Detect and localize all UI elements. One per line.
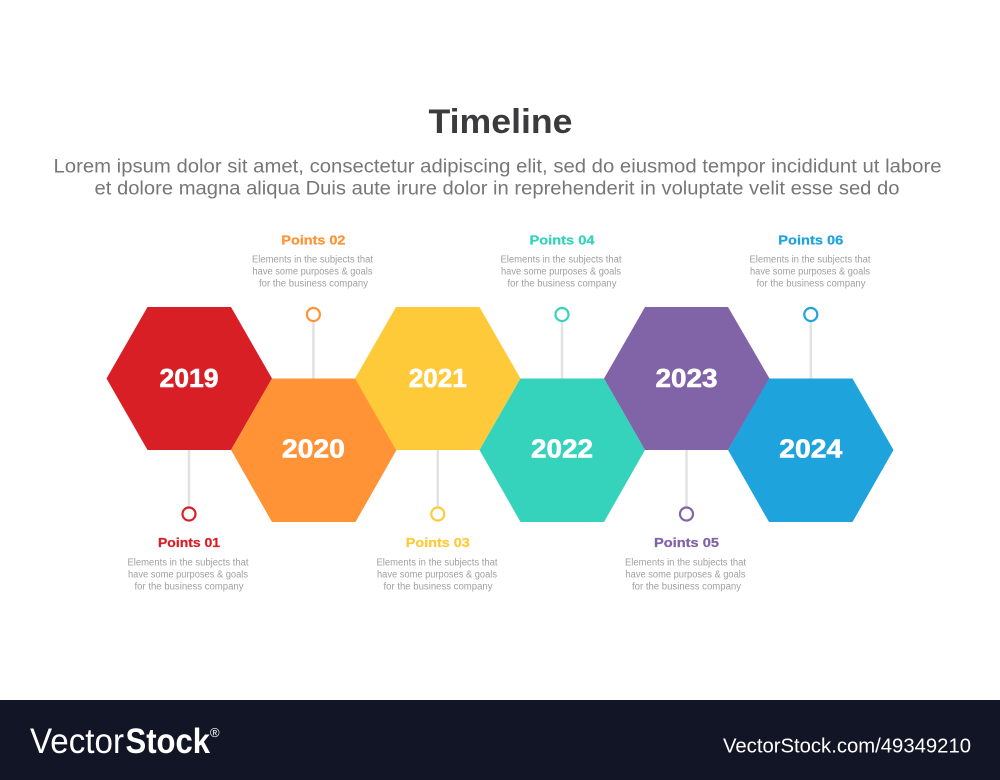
marker 01 — [182, 508, 196, 520]
description 03: for the business company — [384, 582, 492, 592]
description 05: for the business company — [632, 582, 741, 592]
registered mark: ® — [210, 725, 220, 740]
description 01: for the business company — [134, 582, 244, 592]
description 06 — [750, 254, 871, 290]
step 5: 2023 — [604, 307, 770, 592]
description 01: Elements in the subjects that — [128, 558, 249, 568]
step 3: 2021 — [355, 307, 520, 592]
marker 04 — [556, 308, 568, 321]
marker 02 — [307, 308, 320, 321]
marker 05 — [680, 508, 693, 520]
year 2021: 2021 — [409, 363, 467, 393]
marker 03 — [431, 508, 444, 520]
hexagon 2022 — [480, 378, 645, 522]
footer logo — [30, 722, 210, 761]
description 01: have some purposes & goals — [128, 570, 248, 580]
year 2020: 2020 — [282, 434, 345, 464]
description 06: for the business company — [756, 278, 866, 290]
hexagon 2020 — [231, 378, 396, 522]
label Points 06: Points 06 — [778, 232, 843, 248]
description 04: for the business company — [508, 278, 616, 290]
footer logo: Stock — [126, 722, 210, 761]
label Points 04: Points 04 — [530, 232, 595, 248]
year 2019: 2019 — [160, 363, 218, 393]
title: Timeline — [428, 103, 572, 141]
year 2023: 2023 — [656, 363, 718, 393]
description 02 — [252, 254, 373, 290]
description 04: Elements in the subjects that — [500, 254, 622, 266]
description 05 — [625, 558, 746, 592]
footer bar — [0, 700, 1000, 780]
description 06: Elements in the subjects that — [750, 254, 871, 266]
description 03 — [376, 558, 498, 592]
step 4: 2022 — [480, 232, 645, 522]
label Points 02: Points 02 — [281, 232, 345, 248]
description 02: Elements in the subjects that — [252, 254, 373, 266]
hexagon 2019 — [106, 307, 272, 450]
step 1: 2019 — [106, 307, 272, 592]
label Points 03: Points 03 — [406, 535, 470, 550]
description 01 — [128, 558, 249, 592]
subtitle text block: et dolore magna aliqua Duis aute irure dolor in reprehenderit in voluptate velit esse sed do — [94, 178, 899, 200]
step 6: 2024 — [728, 232, 894, 522]
description 04: have some purposes & goals — [501, 266, 621, 278]
subtitle text block — [54, 156, 942, 200]
step 2: 2020 — [231, 232, 396, 522]
description 03: have some purposes & goals — [377, 570, 497, 580]
description 05: have some purposes & goals — [626, 570, 746, 580]
label Points 05: Points 05 — [654, 535, 719, 550]
label Points 01: Points 01 — [158, 535, 220, 550]
description 02: have some purposes & goals — [252, 266, 372, 278]
hexagon 2024 — [728, 378, 894, 522]
footer image id: VectorStock.com/49349210 — [723, 734, 971, 758]
description 05: Elements in the subjects that — [625, 558, 746, 568]
description 06: have some purposes & goals — [750, 266, 870, 278]
footer logo: Vector — [30, 722, 124, 761]
description 02: for the business company — [259, 278, 368, 290]
description 04 — [500, 254, 622, 290]
subtitle text block: Lorem ipsum dolor sit amet, consectetur adipiscing elit, sed do eiusmod tempor incididunt ut labore — [54, 156, 942, 178]
marker 06 — [804, 308, 817, 321]
description 03: Elements in the subjects that — [376, 558, 498, 568]
year 2022: 2022 — [531, 434, 593, 464]
year 2024: 2024 — [779, 434, 843, 464]
hexagon 2023 — [604, 307, 770, 450]
hexagon 2021 — [355, 307, 520, 450]
